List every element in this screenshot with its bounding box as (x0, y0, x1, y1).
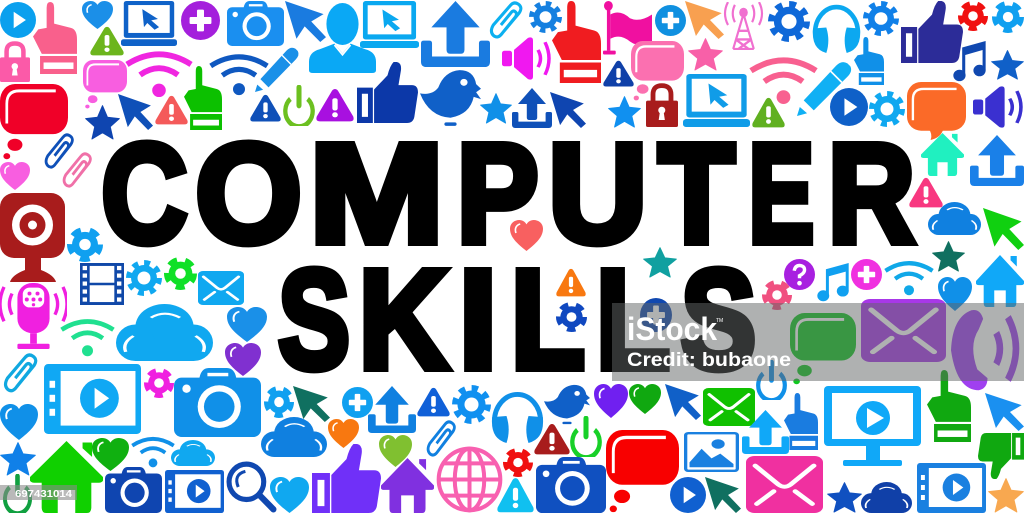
icon: play center (830, 88, 868, 126)
icon: red flower (506, 451, 530, 474)
icon: red chat bottom (606, 430, 679, 512)
icon: purple alert (316, 89, 354, 121)
icon: lime power (285, 87, 313, 127)
icon: purple house (381, 458, 434, 513)
icon: film strip (80, 263, 124, 305)
icon: magenta flower (147, 371, 171, 395)
icon: tablet right (917, 463, 986, 513)
icon: coral heart (510, 220, 543, 251)
icon: gear left (129, 263, 159, 293)
icon: big cloud (116, 304, 213, 361)
watermark logo text: iStock (627, 311, 717, 347)
icon: orange heart (328, 419, 359, 448)
title (101, 114, 915, 399)
icon: alert bottom (417, 388, 450, 416)
title line: COMPUTER (101, 114, 915, 273)
icon: purple thumbs up (312, 444, 381, 513)
icon: cursor arrow (285, 1, 326, 42)
icon: small blue hand (854, 37, 884, 85)
icon: webcam (0, 193, 65, 282)
icon: navy star (86, 106, 119, 139)
icon: orange star (989, 479, 1023, 512)
icon: blue camera (536, 457, 606, 513)
icon: green chat (790, 313, 856, 384)
icon: flower gear (267, 389, 291, 415)
icon: lime heart (379, 435, 412, 467)
icon: navy upload (512, 88, 552, 128)
icon: picture (686, 433, 737, 471)
icon: teal star (644, 248, 676, 277)
icon: thumbs up indigo (901, 1, 963, 63)
icon: monitor (824, 386, 921, 466)
icon: navy camera (105, 467, 162, 513)
icon: lime alert (752, 98, 785, 127)
icon: heart right (938, 277, 972, 311)
icon: blue power (758, 362, 785, 401)
icon: blue star (481, 94, 511, 123)
icon: wifi bottom (132, 439, 174, 467)
icon: small cloud (171, 440, 215, 466)
title line: SKILLS: I (459, 241, 497, 398)
icon: navy arrow (118, 94, 153, 130)
title line: COMPUTER: U (548, 115, 647, 272)
title line: COMPUTER: E (748, 115, 814, 272)
icon: plus blue (655, 5, 686, 36)
title line: SKILLS: L (511, 240, 585, 398)
icon: camera (227, 1, 284, 46)
icon: star bottom left (1, 443, 35, 475)
icon: green heart (92, 438, 129, 471)
icon: red chat (0, 84, 68, 159)
icon: purple plus (181, 1, 220, 40)
icon: music note (953, 41, 986, 81)
icon: magenta chat (83, 60, 127, 109)
icon: heart blue (227, 307, 267, 342)
icon: green hand bottom (927, 370, 971, 442)
icon: coral alert (155, 96, 188, 124)
icon: green heart bottom (629, 384, 661, 414)
icon: cloud right (928, 202, 981, 235)
icon: pink pointing hand (33, 2, 77, 74)
icon: green arrow right (983, 208, 1024, 250)
icon: laptop light (360, 1, 419, 48)
icon: blue gear top (532, 4, 559, 30)
icon: upload sky (742, 410, 789, 454)
icon: pink mail (746, 456, 823, 513)
icon: globe (439, 449, 500, 510)
icon: red alert (534, 424, 570, 454)
icon: purple mail (861, 299, 946, 362)
icon: flag (603, 1, 652, 54)
icon: purple heart (594, 384, 628, 418)
icon: heart lower left (0, 404, 38, 440)
title line: COMPUTER: O (195, 115, 302, 272)
icon: pink star (689, 39, 722, 70)
icon: dark green power (5, 476, 30, 513)
icon: blue wifi (211, 57, 267, 95)
icon: paper clip (491, 3, 521, 37)
title line: COMPUTER: C (101, 115, 187, 272)
icon: blue flower left (71, 230, 99, 258)
icon: play (0, 2, 36, 38)
icon: upload (421, 1, 490, 67)
icon: green alert (90, 27, 124, 55)
icon: navy flower (559, 305, 584, 329)
icon: play bottom (670, 477, 706, 513)
icon: signal tower (725, 2, 762, 49)
icon: big camera (174, 368, 261, 437)
title line: COMPUTER: M (309, 116, 444, 273)
credit text: Credit: bubaone (627, 350, 791, 371)
icon: navy clip (46, 135, 72, 167)
icon: bird bottom (544, 385, 590, 424)
icon: plus bottom (342, 387, 373, 418)
icon: gear right (866, 4, 896, 33)
icon: green house (30, 441, 103, 513)
icon: dark arrow bottom (705, 477, 741, 513)
icon: navy alert right (603, 61, 634, 86)
icon: pink clip (64, 154, 90, 186)
icon: upload right (970, 135, 1024, 186)
icon: thumbs down (978, 433, 1024, 479)
icon: music sky (817, 263, 849, 301)
icon: star right (992, 51, 1023, 79)
icon: headphones bottom (492, 394, 543, 443)
icon: wifi right (885, 263, 933, 295)
icon: navy cloud (861, 482, 912, 513)
icon: pink lock (0, 43, 30, 82)
icon: green power (572, 418, 600, 458)
icon: mail left (198, 271, 244, 305)
icon: arrow bottom (665, 384, 701, 420)
icon: star center (609, 97, 640, 127)
title line: SKILLS: L (596, 240, 670, 398)
icon: magnifier (229, 464, 273, 509)
icon: navy star bottom (828, 483, 861, 512)
icon: gear bottom (456, 389, 487, 420)
icon: pencil (255, 48, 298, 92)
icon: orange arrow (685, 1, 724, 39)
image id label: 697431014 (15, 488, 72, 500)
icon: navy plus (640, 298, 672, 332)
icon: navy arrow center (550, 92, 586, 128)
icon: magenta speaker (502, 37, 549, 80)
icon: sky heart (270, 477, 309, 513)
icon: orange alert (556, 269, 586, 296)
icon: arrow right (985, 393, 1024, 431)
icon: navy alert (250, 95, 281, 121)
icon: blue heart (82, 1, 113, 29)
icon: green wifi (62, 322, 113, 356)
icon: red hand (552, 1, 601, 83)
title line: SKILLS: S (681, 241, 756, 399)
icon: mint house (921, 133, 964, 176)
title line: COMPUTER: T (658, 115, 735, 273)
icon: cloud bottom (261, 417, 327, 457)
icon: dark green star (933, 242, 964, 271)
title line: SKILLS (278, 240, 756, 399)
icon: big pencil (797, 62, 851, 116)
icon: blue flower gear (995, 4, 1021, 30)
icon: cyan alert (497, 478, 534, 512)
icon: heart purple (225, 343, 261, 376)
icon: blue house (976, 255, 1024, 307)
icon: orange chat (907, 82, 966, 140)
icon: laptop center (683, 74, 750, 127)
icon: tablet bottom (165, 470, 224, 513)
icon: hand blue bottom (784, 393, 818, 450)
icon: pink flower (765, 283, 789, 307)
icon: purple phone (951, 310, 1016, 390)
icon: tablet (44, 364, 141, 434)
icon: pink heart (0, 162, 30, 190)
title line: COMPUTER: P (457, 114, 539, 272)
icon: pink chat (631, 41, 684, 100)
image id label (0, 485, 77, 500)
icon: red lock (646, 86, 678, 127)
icon: magenta wifi (127, 54, 191, 97)
icon: red flower gear (961, 4, 985, 28)
icon: laptop (121, 1, 177, 46)
trademark: TM (716, 318, 723, 324)
title line: SKILLS: S (278, 240, 350, 398)
icon: green hand (184, 66, 222, 130)
icon: bird (420, 70, 481, 126)
icon: purple speaker (973, 86, 1021, 128)
icon: microphone (0, 283, 67, 349)
icon: user (309, 3, 376, 73)
title line: COMPUTER: R (828, 114, 915, 272)
icon: pink alert (909, 178, 943, 207)
icon: clip bottom (428, 422, 454, 455)
watermark band (612, 303, 1024, 381)
title line: SKILLS: K (359, 242, 449, 399)
icon: green arrow (293, 386, 330, 422)
icon: question mark (784, 259, 815, 290)
icon: gear center (872, 94, 902, 124)
icon: big gear (772, 5, 806, 38)
icon: clip lower left (6, 355, 36, 391)
icon: headphones (813, 7, 860, 53)
icon: magenta plus (851, 259, 882, 290)
icon: green flower (167, 260, 194, 287)
icon: thumbs up navy (357, 62, 418, 123)
icon: upload bottom (368, 386, 416, 433)
icon: pink wifi (751, 60, 816, 104)
icon: green mail (703, 388, 755, 426)
